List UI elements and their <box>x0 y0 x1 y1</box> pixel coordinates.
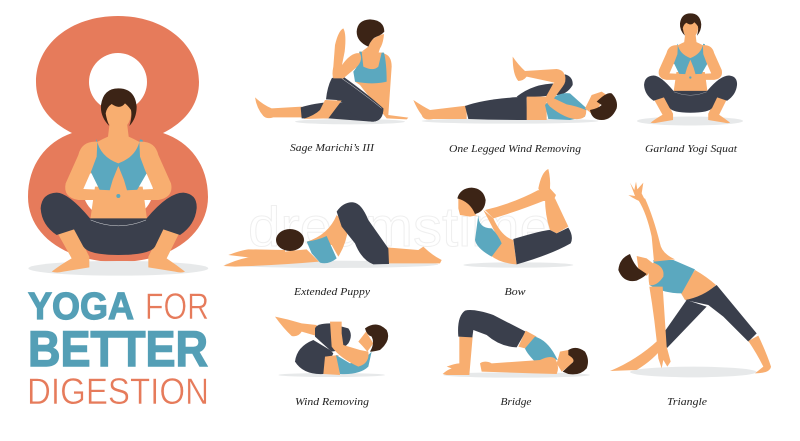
shadow <box>463 262 573 268</box>
label: garland yogi squat: Garland Yogi Squat <box>645 143 738 155</box>
figure: wind removing <box>275 317 388 377</box>
hair <box>563 348 588 374</box>
title line: yoga for: FOR <box>145 286 209 327</box>
hair <box>365 325 388 352</box>
label: triangle: Triangle <box>667 396 707 408</box>
torso <box>527 97 547 120</box>
torso <box>483 210 517 264</box>
seated body <box>41 88 197 272</box>
figure: one legged wind removing <box>413 57 617 124</box>
arm <box>480 357 558 374</box>
title <box>27 286 209 412</box>
watermark: dreamstime <box>248 195 552 258</box>
figure: garland yogi squat <box>637 13 743 126</box>
bent leg thigh <box>517 74 573 98</box>
hair <box>357 19 384 47</box>
ground shadow <box>28 261 208 276</box>
raised arm <box>332 28 361 78</box>
sports top <box>307 236 337 263</box>
raised lower leg <box>275 317 317 336</box>
raised hand <box>628 182 645 202</box>
arm <box>485 190 550 218</box>
label: bridge: Bridge <box>500 396 532 408</box>
number 8 <box>28 16 208 262</box>
torso <box>518 331 537 348</box>
label: one legged wind removing: One Legged Wind Removing <box>449 143 582 155</box>
title line: yoga for <box>28 286 209 328</box>
panel: large number 8 with main figure <box>28 16 208 276</box>
upper arm <box>228 249 285 257</box>
figure: sage marichi III <box>255 19 408 124</box>
sports top <box>649 260 695 293</box>
hair <box>590 93 617 120</box>
shadow <box>225 261 438 268</box>
leggings <box>337 202 389 264</box>
lower bent leg <box>295 340 333 374</box>
label: extended puppy: Extended Puppy <box>293 286 370 298</box>
leggings <box>458 310 526 347</box>
title line: yoga for: YOGA <box>28 286 134 328</box>
lower arm <box>649 287 671 368</box>
shoulder <box>649 263 664 285</box>
figure: extended puppy <box>223 202 442 268</box>
sports top <box>525 337 558 363</box>
shadow <box>422 118 598 124</box>
back leg <box>610 340 663 371</box>
sports top <box>545 93 587 120</box>
torso <box>355 52 387 108</box>
figure: bridge <box>443 310 590 378</box>
face <box>458 198 478 217</box>
torso <box>680 270 716 300</box>
hair <box>618 254 647 281</box>
main figure: garland pose <box>28 88 208 276</box>
upper thigh <box>315 323 351 352</box>
neck and face <box>362 34 384 53</box>
shadow <box>295 119 405 124</box>
title line: digestion: DIGESTION <box>27 371 209 412</box>
foot <box>538 169 556 201</box>
figure: bow <box>457 169 573 268</box>
raised arm <box>638 198 675 262</box>
hair <box>457 188 486 214</box>
shadow <box>630 367 757 377</box>
torso <box>323 355 340 375</box>
sports top <box>475 215 502 257</box>
body <box>644 13 737 123</box>
raised shin <box>513 57 565 83</box>
sports top <box>336 352 372 374</box>
face <box>585 92 607 115</box>
arm <box>546 75 586 119</box>
label: sage marichi: Sage Marichi’s III <box>290 142 375 154</box>
torso <box>307 215 348 257</box>
figure: triangle <box>610 182 771 377</box>
title line: better: BETTER <box>28 321 208 377</box>
straight leg <box>413 100 467 119</box>
rear arm <box>383 53 408 119</box>
shin <box>545 198 568 233</box>
lower leg <box>387 247 442 263</box>
face <box>358 332 373 352</box>
label: bow: Bow <box>504 286 526 298</box>
shadow <box>637 116 743 126</box>
leggings <box>513 228 572 264</box>
shadow <box>443 372 590 378</box>
front leg <box>685 285 757 342</box>
straight leg <box>255 97 302 118</box>
face <box>637 256 655 276</box>
lower leg and foot <box>443 337 473 375</box>
arm <box>330 322 369 367</box>
bent leg <box>326 76 383 122</box>
near arm <box>223 249 319 267</box>
label: wind removing: Wind Removing <box>295 396 370 408</box>
hair <box>276 229 304 251</box>
shadow <box>278 373 385 377</box>
face <box>557 350 575 372</box>
sports top <box>353 52 387 83</box>
